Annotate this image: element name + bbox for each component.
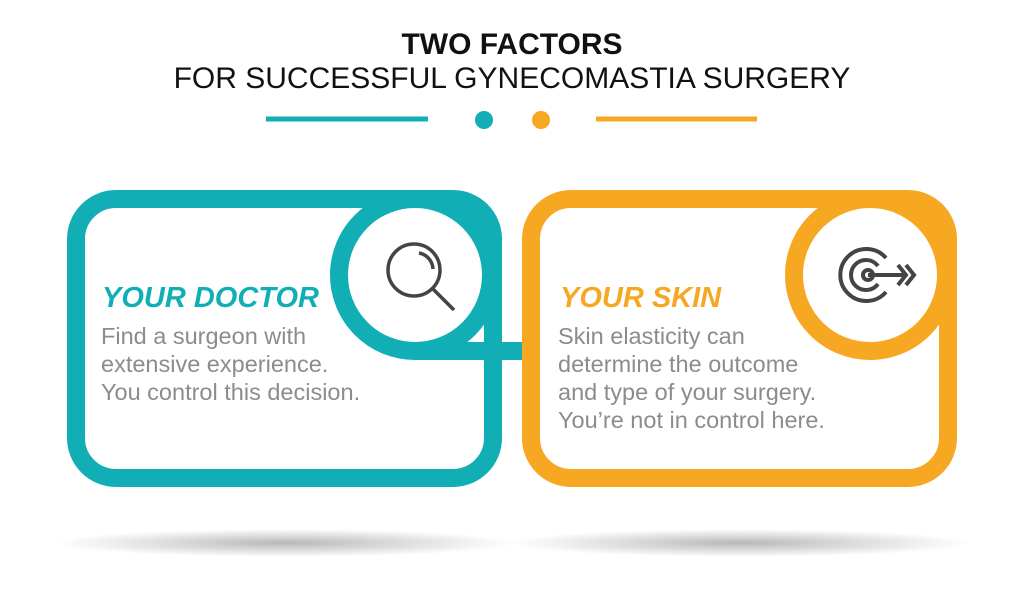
title: FOR SUCCESSFUL GYNECOMASTIA SURGERY xyxy=(174,62,850,95)
text: skin xyxy=(558,323,825,433)
icon: target xyxy=(840,249,914,301)
text: doctor: You control this decision. xyxy=(101,379,360,405)
panel: your skin frame xyxy=(531,199,948,478)
text: doctor xyxy=(101,323,360,405)
heading: your doctor: YOUR DOCTOR xyxy=(102,282,319,314)
text: skin: determine the outcome xyxy=(558,351,798,377)
title: TWO FACTORS xyxy=(401,28,623,61)
icon: magnifier xyxy=(388,244,454,310)
text: skin: You’re not in control here. xyxy=(558,407,825,433)
title xyxy=(174,28,850,95)
heading: your skin: YOUR SKIN xyxy=(560,282,721,314)
text: skin: and type of your surgery. xyxy=(558,379,816,405)
panel: your doctor frame xyxy=(76,199,535,478)
text: skin: Skin elasticity can xyxy=(558,323,745,349)
text: doctor: extensive experience. xyxy=(101,351,328,377)
shadows xyxy=(55,529,970,557)
divider ornament xyxy=(266,111,757,129)
text: doctor: Find a surgeon with xyxy=(101,323,306,349)
